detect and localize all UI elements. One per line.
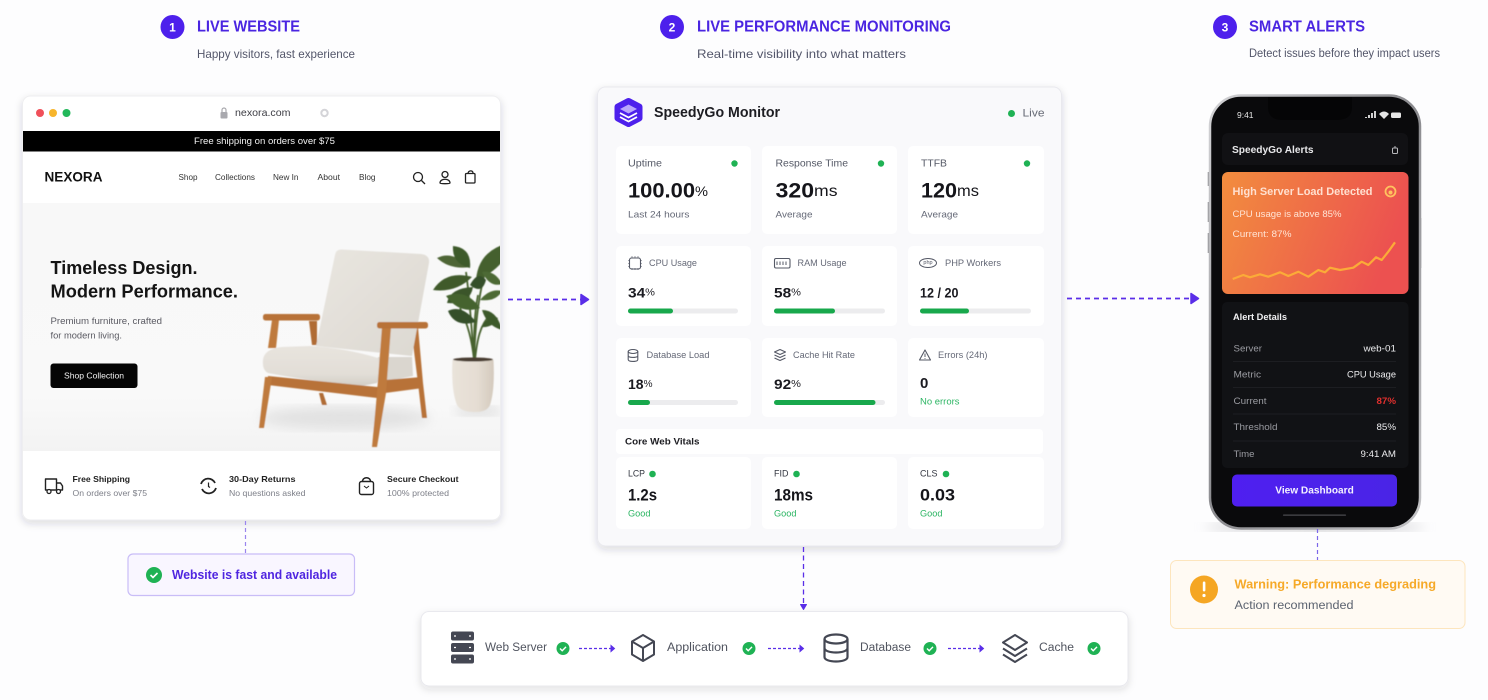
arrow: monitor to infrastructure [800,547,806,610]
vital card: cls: CLS [920,468,938,480]
pot [452,358,494,412]
panel: browser window with website [22,96,502,520]
promo bar [23,131,500,152]
step 1 heading [160,15,355,61]
metric card: ttfb: Average [921,210,958,220]
feature: 30-day returns: No questions asked [229,488,306,498]
shop collection button: Shop Collection [64,372,124,380]
vital card: cls: Good [920,508,942,520]
hero banner background [23,203,500,451]
subheading: performance monitoring: Real-time visibility into what matters [697,47,906,61]
metric card: errors: 0 [920,375,928,392]
alert card: high server load [1222,172,1408,294]
site navigation: About [318,173,341,182]
site navigation: Blog [359,173,376,182]
metric card: cpu usage: 34% [628,284,655,300]
metric card: cache hit rate: Cache Hit Rate [793,350,855,360]
vital card: lcp: 1.2s [628,486,657,504]
view dashboard button [1232,474,1397,506]
view dashboard button: View Dashboard [1275,484,1354,496]
feature: secure checkout [360,474,459,498]
step number badge 2: 2 [669,20,676,34]
panel: infrastructure status chain [421,612,1128,686]
alert card: high server load: High Server Load Detected [1232,186,1372,198]
detail row: current [1234,396,1396,406]
promo bar: Free shipping on orders over $75 [194,136,335,146]
alert details panel: Alert Details [1233,312,1287,323]
connector: phone to warning [1316,529,1318,560]
step 3 heading [1213,15,1440,60]
seat [378,357,413,383]
metric card: cache hit rate: 92% [774,376,801,392]
metric card: cache hit rate [762,338,897,417]
vital card: fid: 18ms [774,486,813,504]
metric card: ram usage: 58% [774,284,801,300]
product photo: armchair and plant [259,245,502,447]
step: cache [1003,635,1100,662]
site navigation: Shop [178,173,198,182]
phone side buttons [1208,172,1420,268]
speedygo logo [618,102,639,124]
heading: smart alerts: SMART ALERTS [1249,18,1365,36]
arrow: website to monitor [508,294,588,304]
step 2 heading [660,15,951,61]
metric card: ram usage: RAM Usage [798,258,846,268]
metric card: errors [908,338,1044,417]
app header: SpeedyGo Alerts [1232,144,1314,156]
arrow: database to cache [948,646,984,652]
step number badge 3 [1213,15,1237,39]
detail row: time: Time [1234,449,1254,459]
step: web server: Web Server [485,642,547,654]
detail row: metric: CPU Usage [1347,370,1396,380]
hero headline: Timeless Design. [50,258,198,278]
metric card: ttfb: 120ms [921,180,979,202]
hero description [50,316,162,340]
hero headline: Modern Performance. [50,282,238,302]
browser title bar: nexora.com [235,107,291,119]
metric card: cpu usage: CPU Usage [649,258,697,268]
metric card: database load: 18% [628,376,653,392]
metric card: cpu usage [616,246,751,326]
alert card: high server load: Current: 87% [1232,229,1292,239]
detail row: current: 87% [1376,396,1396,406]
metric card: ttfb: TTFB [921,158,947,170]
chair rear legs [319,393,327,405]
metric card: database load [616,338,751,417]
cpu sparkline [1233,242,1395,279]
home indicator [1283,514,1346,516]
hero description: Premium furniture, crafted [50,316,162,326]
detail row: threshold [1234,422,1396,432]
detail row: metric [1234,370,1396,380]
step: application: Application [667,642,728,654]
feature: free shipping: On orders over $75 [72,488,147,498]
arrow: monitor to alerts [1067,294,1198,304]
live indicator: Live [1022,108,1044,120]
detail row: server: web-01 [1362,344,1396,354]
callout: website is fast and available: Website is fast and available [172,568,337,582]
vital card: lcp: LCP [628,468,645,480]
callout: performance warning: Action recommended [1234,600,1354,612]
detail row: time [1234,449,1396,459]
detail row: threshold: 85% [1376,422,1396,432]
metric card: errors: No errors [920,396,960,406]
section heading: core web vitals: Core Web Vitals [625,436,700,448]
arm rests [263,314,320,320]
metric card: uptime [616,146,751,234]
dashboard title: SpeedyGo Monitor [654,105,780,121]
vital card: fid [762,457,897,529]
metric card: php workers: PHP Workers [945,258,1002,268]
shop collection button [50,364,138,388]
feature: 30-day returns: 30-Day Returns [229,474,296,484]
detail row: server [1234,344,1396,354]
metric card: ttfb [908,146,1044,234]
feature: free shipping: Free Shipping [72,474,130,484]
vital card: fid: Good [774,508,796,520]
heading: live website: LIVE WEBSITE [197,18,300,36]
plant [433,245,502,360]
vital card: fid: FID [774,468,789,480]
hero headline [50,258,238,302]
step: cache: Cache [1039,642,1074,654]
subheading: live website: Happy visitors, fast experience [197,47,355,61]
step number badge 1: 1 [169,20,176,34]
metric card: uptime: Uptime [628,158,662,170]
metric card: response time: Response Time [776,158,848,170]
arrow: server to application [579,646,614,652]
metric card: errors: Errors (24h) [938,350,988,360]
subheading: smart alerts: Detect issues before they impact users [1249,48,1440,60]
status bar [1237,110,1401,120]
rails [268,376,423,398]
browser title bar [36,107,328,119]
vital card: cls [908,457,1044,529]
site navigation: New In [273,173,298,182]
metric card: php workers: 12 / 20 [920,284,959,300]
notch [1268,97,1352,120]
step: database: Database [860,642,911,654]
feature: secure checkout: 100% protected [387,488,449,498]
step: web server [451,632,570,664]
detail row: current: Current [1234,396,1267,406]
metric card: php workers [908,246,1044,326]
connector: browser to status callout [244,521,246,553]
feature: free shipping [46,474,147,498]
site navigation: NEXORA [44,170,103,184]
hero description: for modern living. [50,330,122,340]
alert details panel [1222,302,1408,468]
panel: smartphone with alerts [1205,96,1425,531]
metric card: response time [762,146,897,234]
arrow: application to database [768,646,804,652]
backrest [316,249,429,356]
step number badge 1 [160,15,184,39]
metric card: uptime: Last 24 hours [628,210,690,220]
detail row: time: 9:41 AM [1360,449,1396,459]
step: application [632,635,756,661]
step: database [824,634,936,662]
status bar: 9:41 [1237,110,1254,120]
callout: performance warning: Warning: Performance degrading [1234,576,1436,592]
front legs [259,377,272,428]
vital card: lcp [616,457,751,529]
step number badge 3: 3 [1222,20,1229,34]
metric card: response time: 320ms [776,180,838,202]
step number badge 2 [660,15,684,39]
metric card: database load: Database Load [646,350,710,360]
metric card: php workers: php [923,260,933,266]
site navigation: Collections [215,173,255,182]
metric card: uptime: 100.00% [628,180,708,202]
site navigation [44,170,475,184]
heading: live performance monitoring: LIVE PERFORMANCE MONITORING [697,18,951,36]
metric card: ram usage [762,246,897,326]
detail row: server: Server [1234,344,1262,354]
app header [1222,133,1408,165]
vital card: cls: 0.03 [920,486,955,504]
callout: performance warning [1170,560,1465,628]
section heading: core web vitals [616,429,1043,454]
metric card: response time: Average [776,210,812,220]
feature: secure checkout: Secure Checkout [387,474,459,484]
live indicator [1008,108,1044,120]
vital card: lcp: Good [628,508,650,520]
detail row: metric: Metric [1234,370,1262,380]
phone body [1210,96,1420,528]
alert card: high server load: CPU usage is above 85% [1232,209,1342,219]
feature: 30-day returns [201,474,306,498]
panel: speedygo monitor dashboard [598,87,1062,546]
callout: website is fast and available [128,554,354,596]
detail row: threshold: Threshold [1234,422,1278,432]
